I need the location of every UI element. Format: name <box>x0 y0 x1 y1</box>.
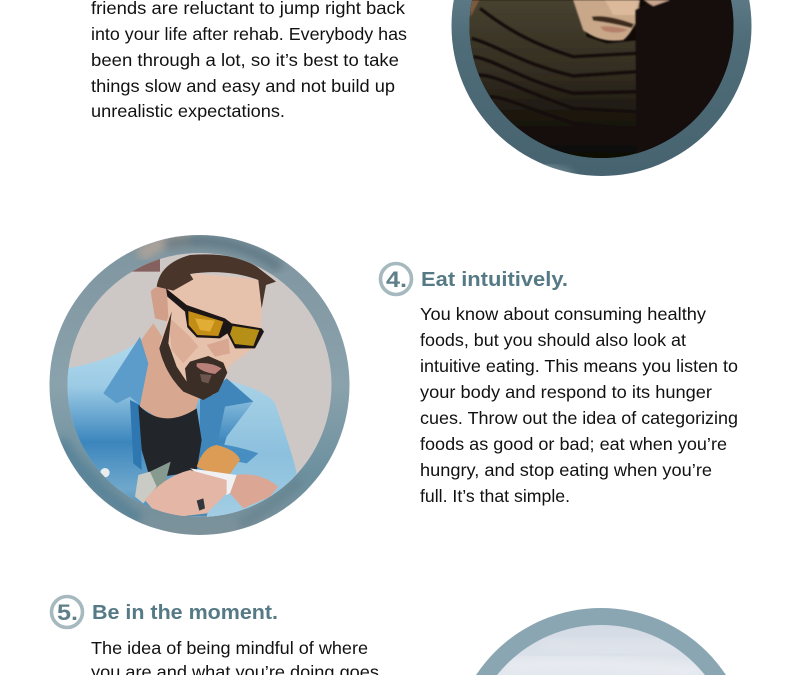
text block: section 4 body: foods as good or bad; eat when you’re <box>420 434 727 454</box>
heading: Eat intuitively: Eat intuitively. <box>421 268 568 291</box>
text block: section 5 body <box>91 638 379 675</box>
head <box>151 254 276 400</box>
hands <box>145 470 227 517</box>
text block: section 4 body: cues. Throw out the idea of categorizing <box>420 408 738 428</box>
arm shadow and hand <box>635 0 733 157</box>
text block: section 4 body <box>420 304 738 506</box>
face <box>160 273 263 395</box>
ear <box>151 287 168 322</box>
text block: section 3 body: been through a lot, so it’s best to take <box>91 50 399 70</box>
hair <box>157 254 276 308</box>
body <box>67 250 297 517</box>
text block: section 4 body: full. It’s that simple. <box>420 486 570 506</box>
ring on finger <box>197 498 205 511</box>
text block: section 4 body: You know about consuming healthy <box>420 304 706 324</box>
text block: section 3 body: unrealistic expectations. <box>91 101 285 121</box>
sunglasses <box>166 288 264 348</box>
background maroon band <box>130 250 160 272</box>
collars <box>103 337 148 405</box>
text block: section 4 body: your body and respond to its hunger <box>420 382 712 402</box>
text block: section 3 body <box>91 0 407 121</box>
right sleeve <box>197 378 297 517</box>
heading: Be in the moment: Be in the moment. <box>92 601 278 624</box>
text block: section 4 body: foods, but you should also look at <box>420 330 686 350</box>
badge: number 4 <box>380 264 412 294</box>
burger <box>196 445 240 474</box>
badge: number 4: 4. <box>386 267 407 292</box>
text block: section 3 body: things slow and easy and not build up <box>91 76 395 96</box>
jacket button <box>100 468 110 477</box>
text block: section 4 body: hungry, and stop eating when you’re <box>420 460 712 480</box>
face <box>573 0 640 41</box>
black t-shirt <box>138 405 202 478</box>
badge: number 5: 5. <box>57 600 78 625</box>
sweater lit side <box>468 0 640 163</box>
left jacket <box>67 330 253 517</box>
badge: number 5 <box>52 596 82 628</box>
text block: section 4 body: intuitive eating. This means you listen to <box>420 356 738 376</box>
photo: man with striped sweater in circular frame <box>452 0 752 176</box>
photo: man with sunglasses eating a burger in circular frame <box>50 235 350 535</box>
neck <box>138 323 200 422</box>
text block: section 5 body: The idea of being mindful of where <box>91 638 368 658</box>
beard <box>159 312 227 400</box>
photo: sky in circular frame <box>476 608 726 675</box>
text block: section 3 body: into your life after rehab. Everybody has <box>91 24 407 44</box>
sweater stripes <box>472 8 637 130</box>
